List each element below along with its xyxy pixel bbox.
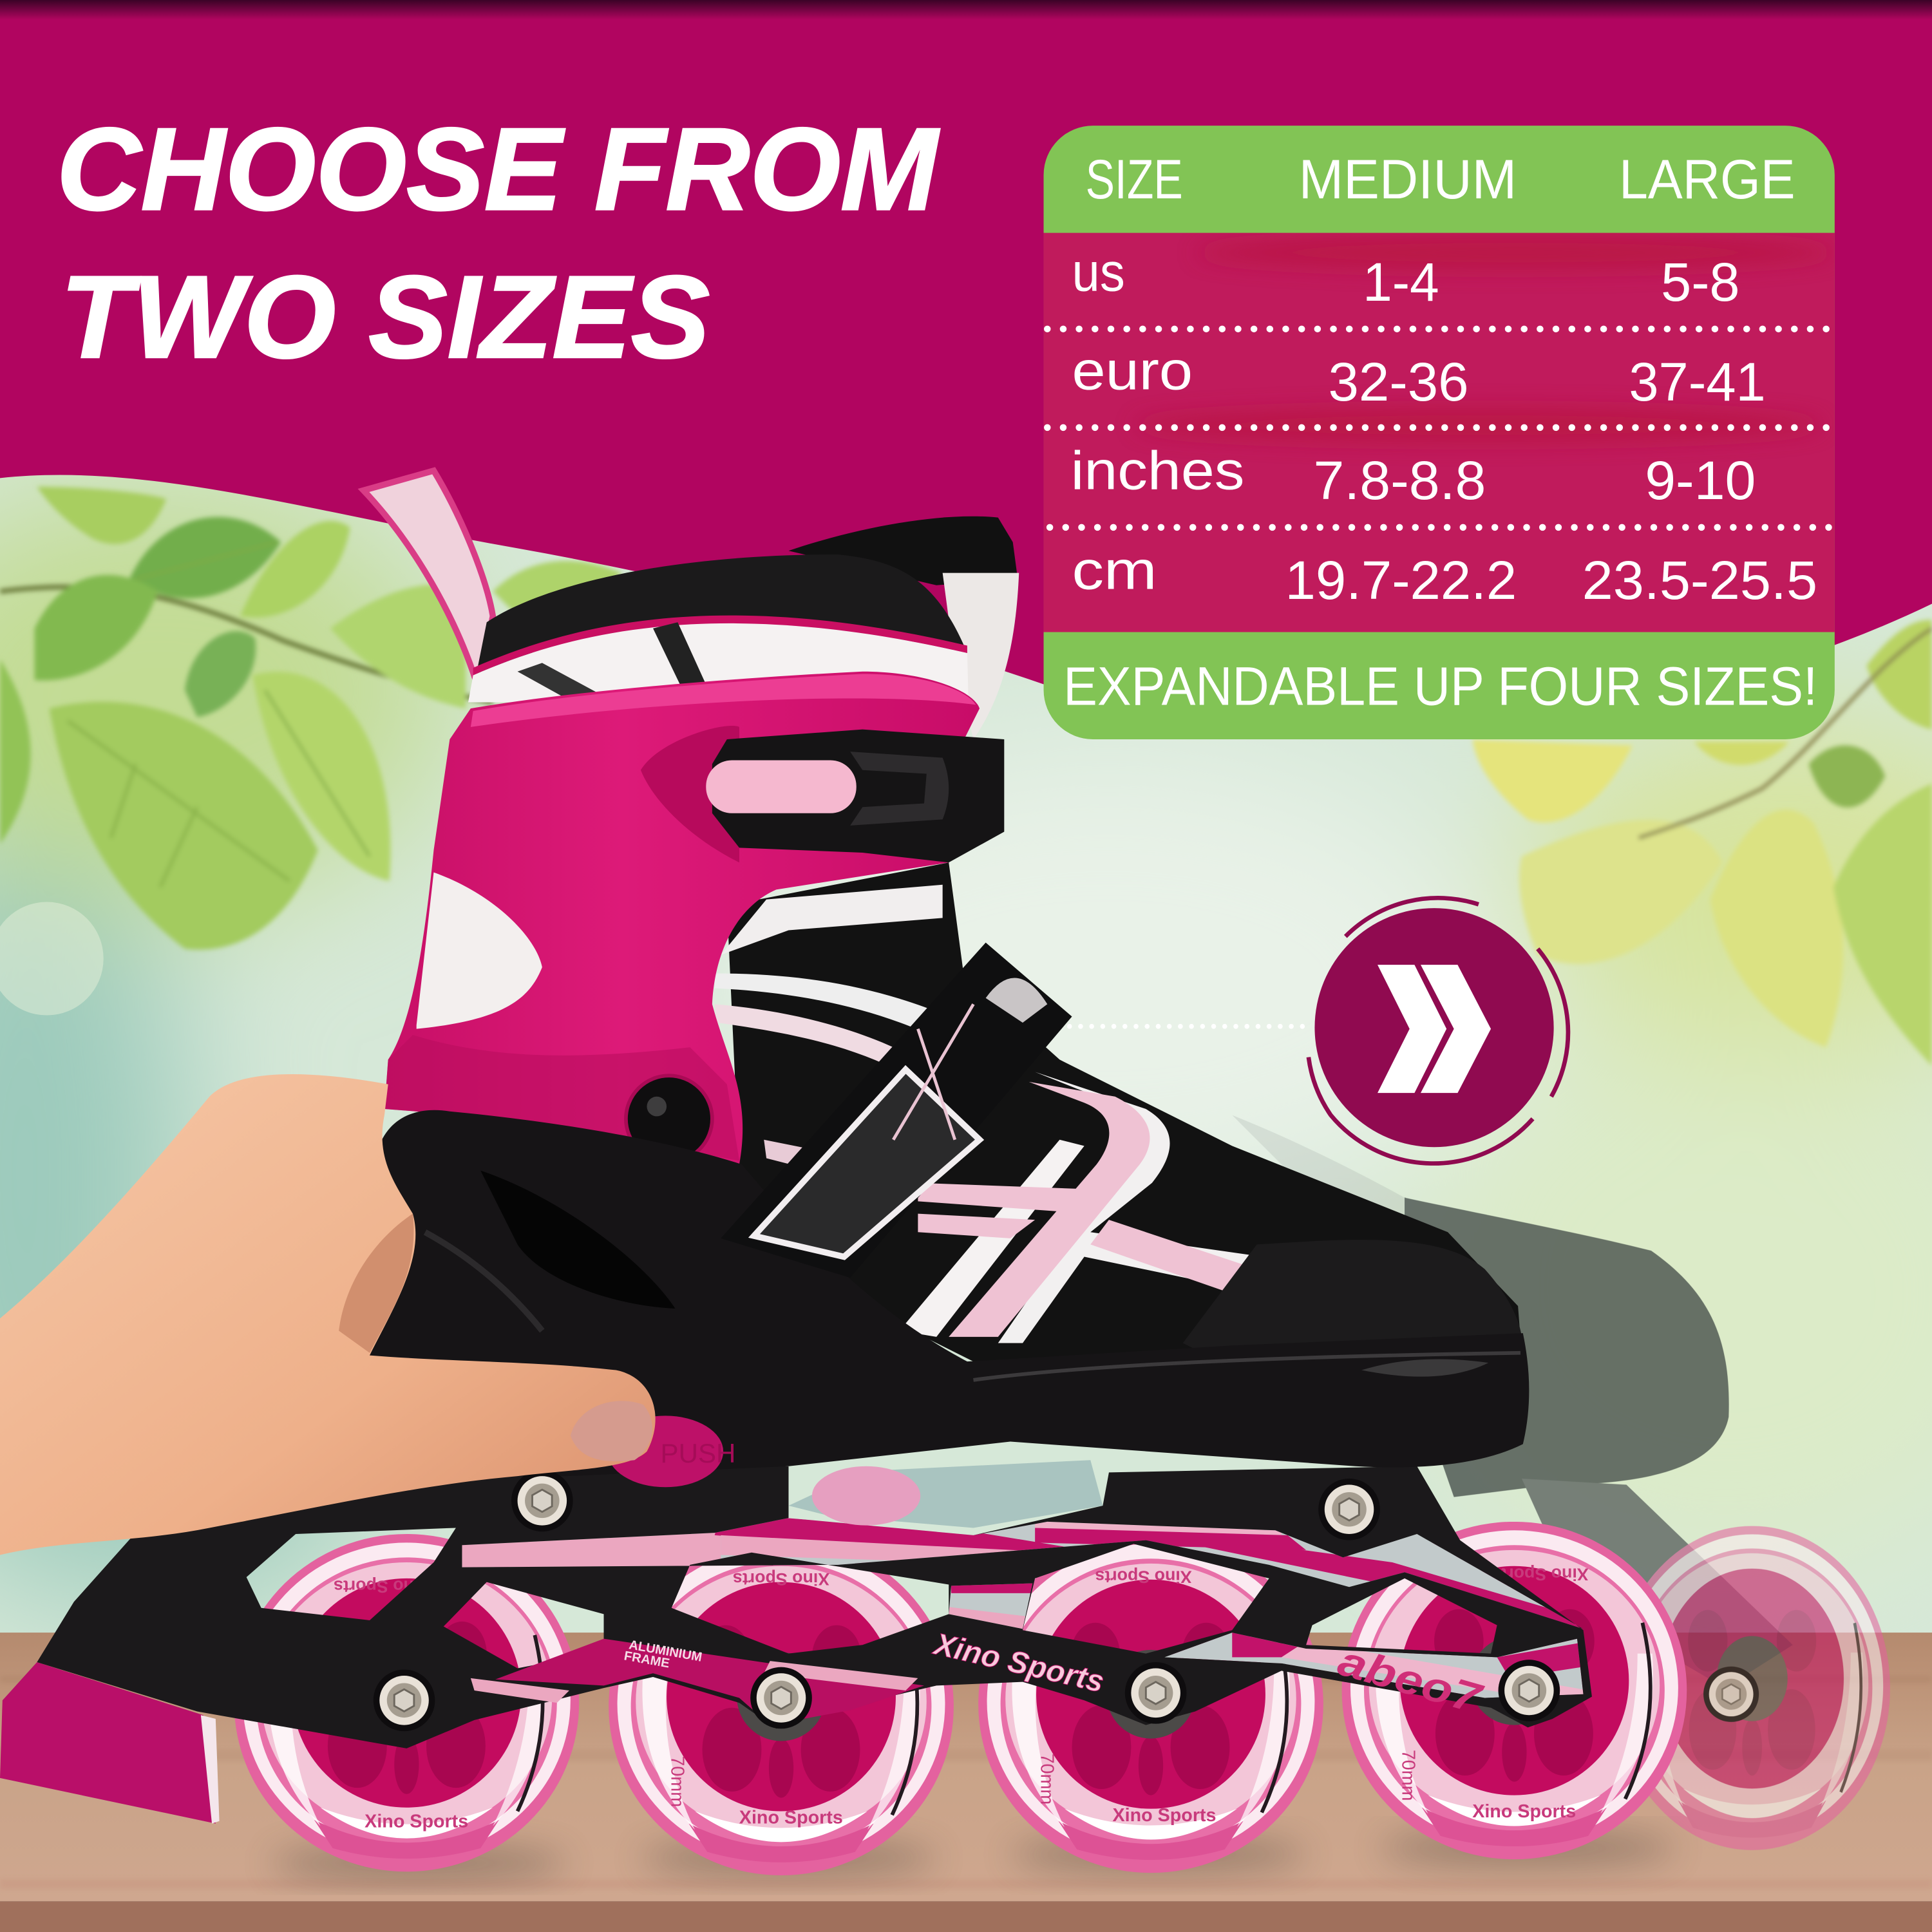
table rows: euro <box>1072 341 1193 401</box>
boot gap under sole <box>788 1460 1103 1528</box>
wheel 2 <box>609 1538 954 1875</box>
table footer: EXPANDABLE UP FOUR SIZES! <box>1063 656 1817 716</box>
table rows <box>1071 242 1817 611</box>
frame logo: Xino Sports: Xino Sports <box>929 1627 1107 1700</box>
table rows: inches <box>1071 440 1244 501</box>
size table <box>1044 126 1836 739</box>
liner <box>468 616 969 703</box>
leaves: right branch <box>1472 620 1932 1066</box>
table header row: SIZE <box>1086 149 1183 211</box>
aluminium frame panel: ALUMINIUM <box>628 1638 703 1665</box>
wheel 3 <box>978 1535 1323 1873</box>
frame black body <box>37 1466 1592 1748</box>
frame logo: abeo7: abeo7 <box>1333 1636 1488 1723</box>
table rows: 19.7-22.2 <box>1285 550 1517 611</box>
wheel 4: Xino Sports <box>1472 1801 1576 1822</box>
skate wheels <box>234 1522 1687 1880</box>
aluminium frame panel <box>471 1638 924 1725</box>
rear collar and tongue <box>475 516 1019 739</box>
table header row: MEDIUM <box>1299 149 1517 211</box>
table header row <box>1086 149 1795 211</box>
banner <box>0 0 1932 730</box>
leaves: left branch <box>0 487 622 950</box>
wheel 4: Xino Sports <box>1492 1565 1589 1584</box>
table rows: 7.8-8.8 <box>1314 450 1486 511</box>
wheel 1: Xino Sports <box>334 1577 430 1596</box>
hand <box>0 1074 656 1555</box>
title: CHOOSE FROM <box>57 103 940 234</box>
skate boot <box>363 471 1529 1540</box>
table rows: 37-41 <box>1629 352 1766 412</box>
cuff shell <box>384 672 980 1164</box>
table rows: 32-36 <box>1328 352 1469 412</box>
chevrons <box>1378 965 1491 1093</box>
dotted connector <box>1070 1025 1314 1028</box>
brake <box>0 1662 220 1824</box>
aluminium frame panel: FRAME <box>623 1649 670 1671</box>
release button <box>607 1416 735 1487</box>
table header row: LARGE <box>1619 149 1795 211</box>
wheel 3: 70mm <box>1037 1754 1057 1804</box>
pull tab <box>363 471 493 688</box>
wheel 4 <box>1342 1522 1687 1859</box>
wheel 1 <box>234 1534 579 1871</box>
table rows: cm <box>1072 540 1157 601</box>
frame stripes <box>462 1518 1583 1698</box>
expand arrow badge <box>1070 898 1568 1164</box>
wheel 2: 70mm <box>667 1756 688 1807</box>
table rows: us <box>1072 242 1125 303</box>
shell bolts <box>511 1470 1380 1540</box>
table rows: 9-10 <box>1645 450 1756 511</box>
boot upper body <box>715 862 1522 1368</box>
buckle <box>706 730 1004 862</box>
table rows: 23.5-25.5 <box>1582 550 1817 611</box>
boot shell <box>367 1110 1529 1476</box>
table rows: 5-8 <box>1661 252 1740 312</box>
wooden table <box>0 1633 1932 1932</box>
release button: PUSH <box>661 1438 735 1468</box>
wheel 3: Xino Sports <box>1113 1805 1217 1826</box>
velcro strap <box>721 943 1072 1278</box>
cuff white inset <box>417 873 542 1029</box>
wheel 3: Xino Sports <box>1095 1567 1192 1586</box>
ghost skate behind <box>1232 1115 1890 1850</box>
title <box>57 103 940 383</box>
toe stripes <box>998 1072 1263 1343</box>
title: TWO SIZES <box>61 251 710 383</box>
frame <box>37 1466 1602 1748</box>
table rows: 1-4 <box>1363 252 1439 312</box>
wheel 1: Xino Sports <box>365 1811 468 1832</box>
wheel 2: Xino Sports <box>739 1808 843 1828</box>
wheel 2: Xino Sports <box>733 1569 829 1589</box>
frame bolts <box>374 1660 1560 1731</box>
rivet <box>626 1075 712 1162</box>
wheel 4: 70mm <box>1397 1750 1418 1801</box>
